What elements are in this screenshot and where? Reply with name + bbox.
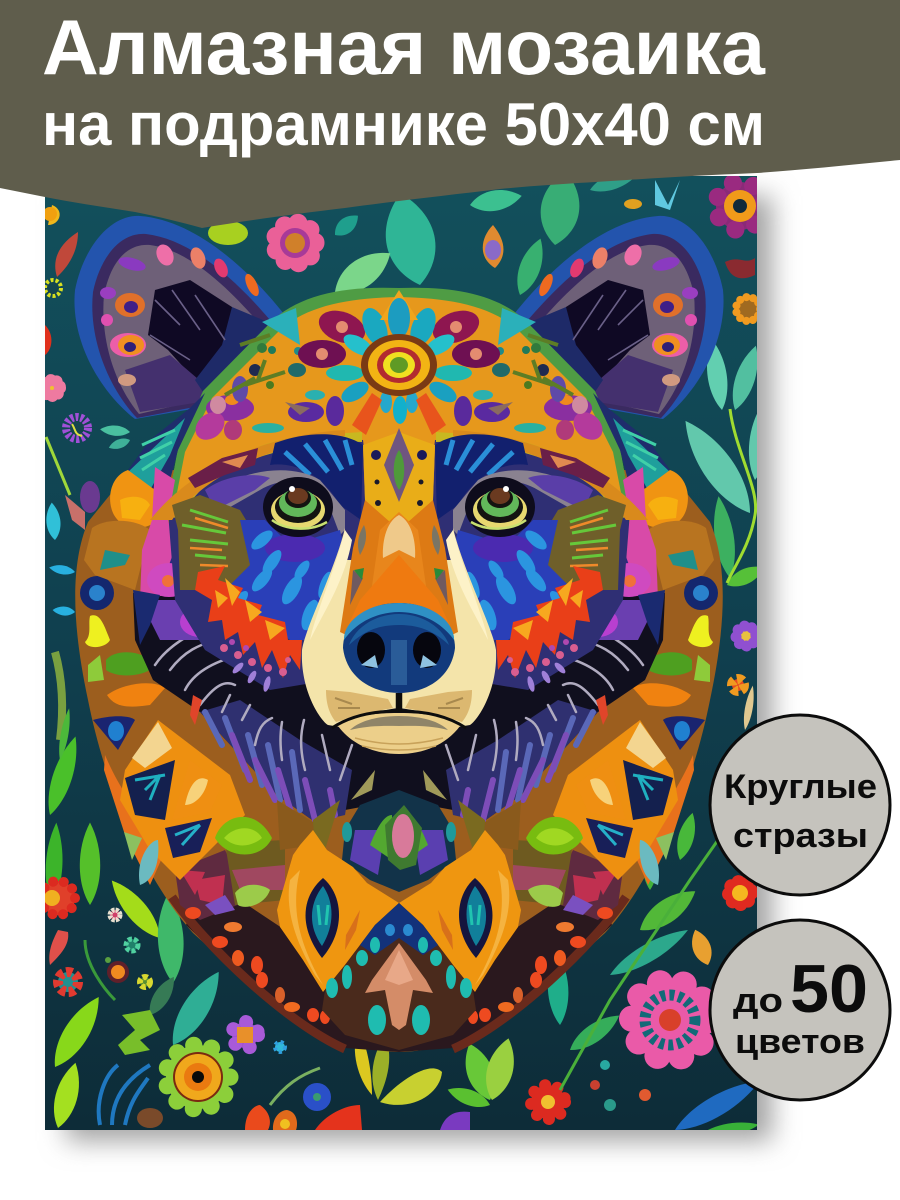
- bear left half: [74, 216, 399, 1052]
- flower: green and orange: [166, 1045, 230, 1109]
- background foliage and flowers: [41, 165, 770, 1141]
- badge text line 2: стразы: [733, 817, 868, 855]
- flower: purple: [232, 1022, 258, 1048]
- badge text line 1: Круглые: [724, 768, 877, 806]
- flower: pink top: [275, 223, 315, 263]
- painting: colorful bear: [41, 165, 770, 1141]
- badge: up to 50 colours: [710, 920, 890, 1100]
- flower: top right: [716, 182, 764, 230]
- canvas shadow: [66, 196, 772, 1141]
- bear right half: [399, 216, 724, 1052]
- badge label: цветов: [735, 1023, 865, 1061]
- badge: round rhinestones: [710, 715, 890, 895]
- chest ornament: [385, 805, 422, 870]
- forehead medallion: [361, 290, 437, 424]
- badge number: 50: [790, 951, 868, 1027]
- title banner: [0, 0, 900, 228]
- subtitle: на подрамнике 50х40 см: [42, 91, 765, 158]
- flower: big pink: [632, 982, 708, 1058]
- badge prefix: до: [733, 982, 783, 1020]
- title: Алмазная мозаика: [42, 3, 766, 91]
